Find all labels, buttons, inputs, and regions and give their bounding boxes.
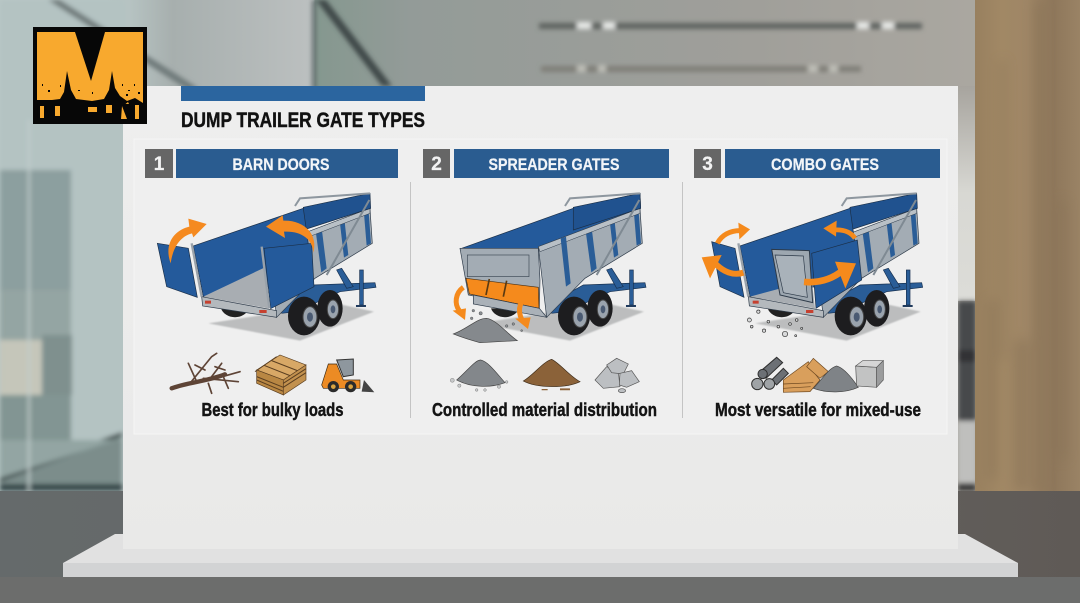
card [134,139,947,434]
pile [453,318,517,343]
display board [63,86,1018,577]
trailer illustration: barn doors open [157,193,376,341]
icon: branches [172,353,240,393]
icon: gravel pile [450,360,508,391]
caption: Controlled material distribution [432,400,657,420]
panel: barn doors [145,149,398,420]
icon: concrete block [856,361,883,387]
panel: spreader gates [423,149,669,420]
panel: combo gates [694,149,940,420]
icon: gravel [813,366,858,392]
heading: barn doors: BARN DOORS [232,155,330,174]
title bar accent [181,86,425,101]
icon: pallets [255,355,306,395]
heading: spreader gates: SPREADER GATES [488,155,620,174]
icon: dirt pile [523,359,580,390]
number badge 3 [694,149,721,178]
number badge 2 [423,149,450,178]
logo [33,27,147,124]
heading: combo gates [725,149,940,178]
heading: combo gates: COMBO GATES [771,155,879,174]
caption: Most versatile for mixed-use [715,400,921,420]
heading: barn doors [176,149,398,178]
heading: spreader gates [454,149,669,178]
number badge 1 [145,149,173,178]
title: DUMP TRAILER GATE TYPES [181,109,425,132]
caption: Best for bulky loads [202,400,344,420]
number badge 3: 3 [702,154,713,175]
icon: pipes [752,357,788,390]
trailer illustration: spreader gate [453,193,646,343]
trailer illustration: combo gate [702,193,923,341]
icon: skid steer [322,359,374,392]
number badge 1: 1 [154,154,165,175]
number badge 2: 2 [431,154,442,175]
icon: rocks [595,358,639,393]
icon: lumber [783,358,828,392]
